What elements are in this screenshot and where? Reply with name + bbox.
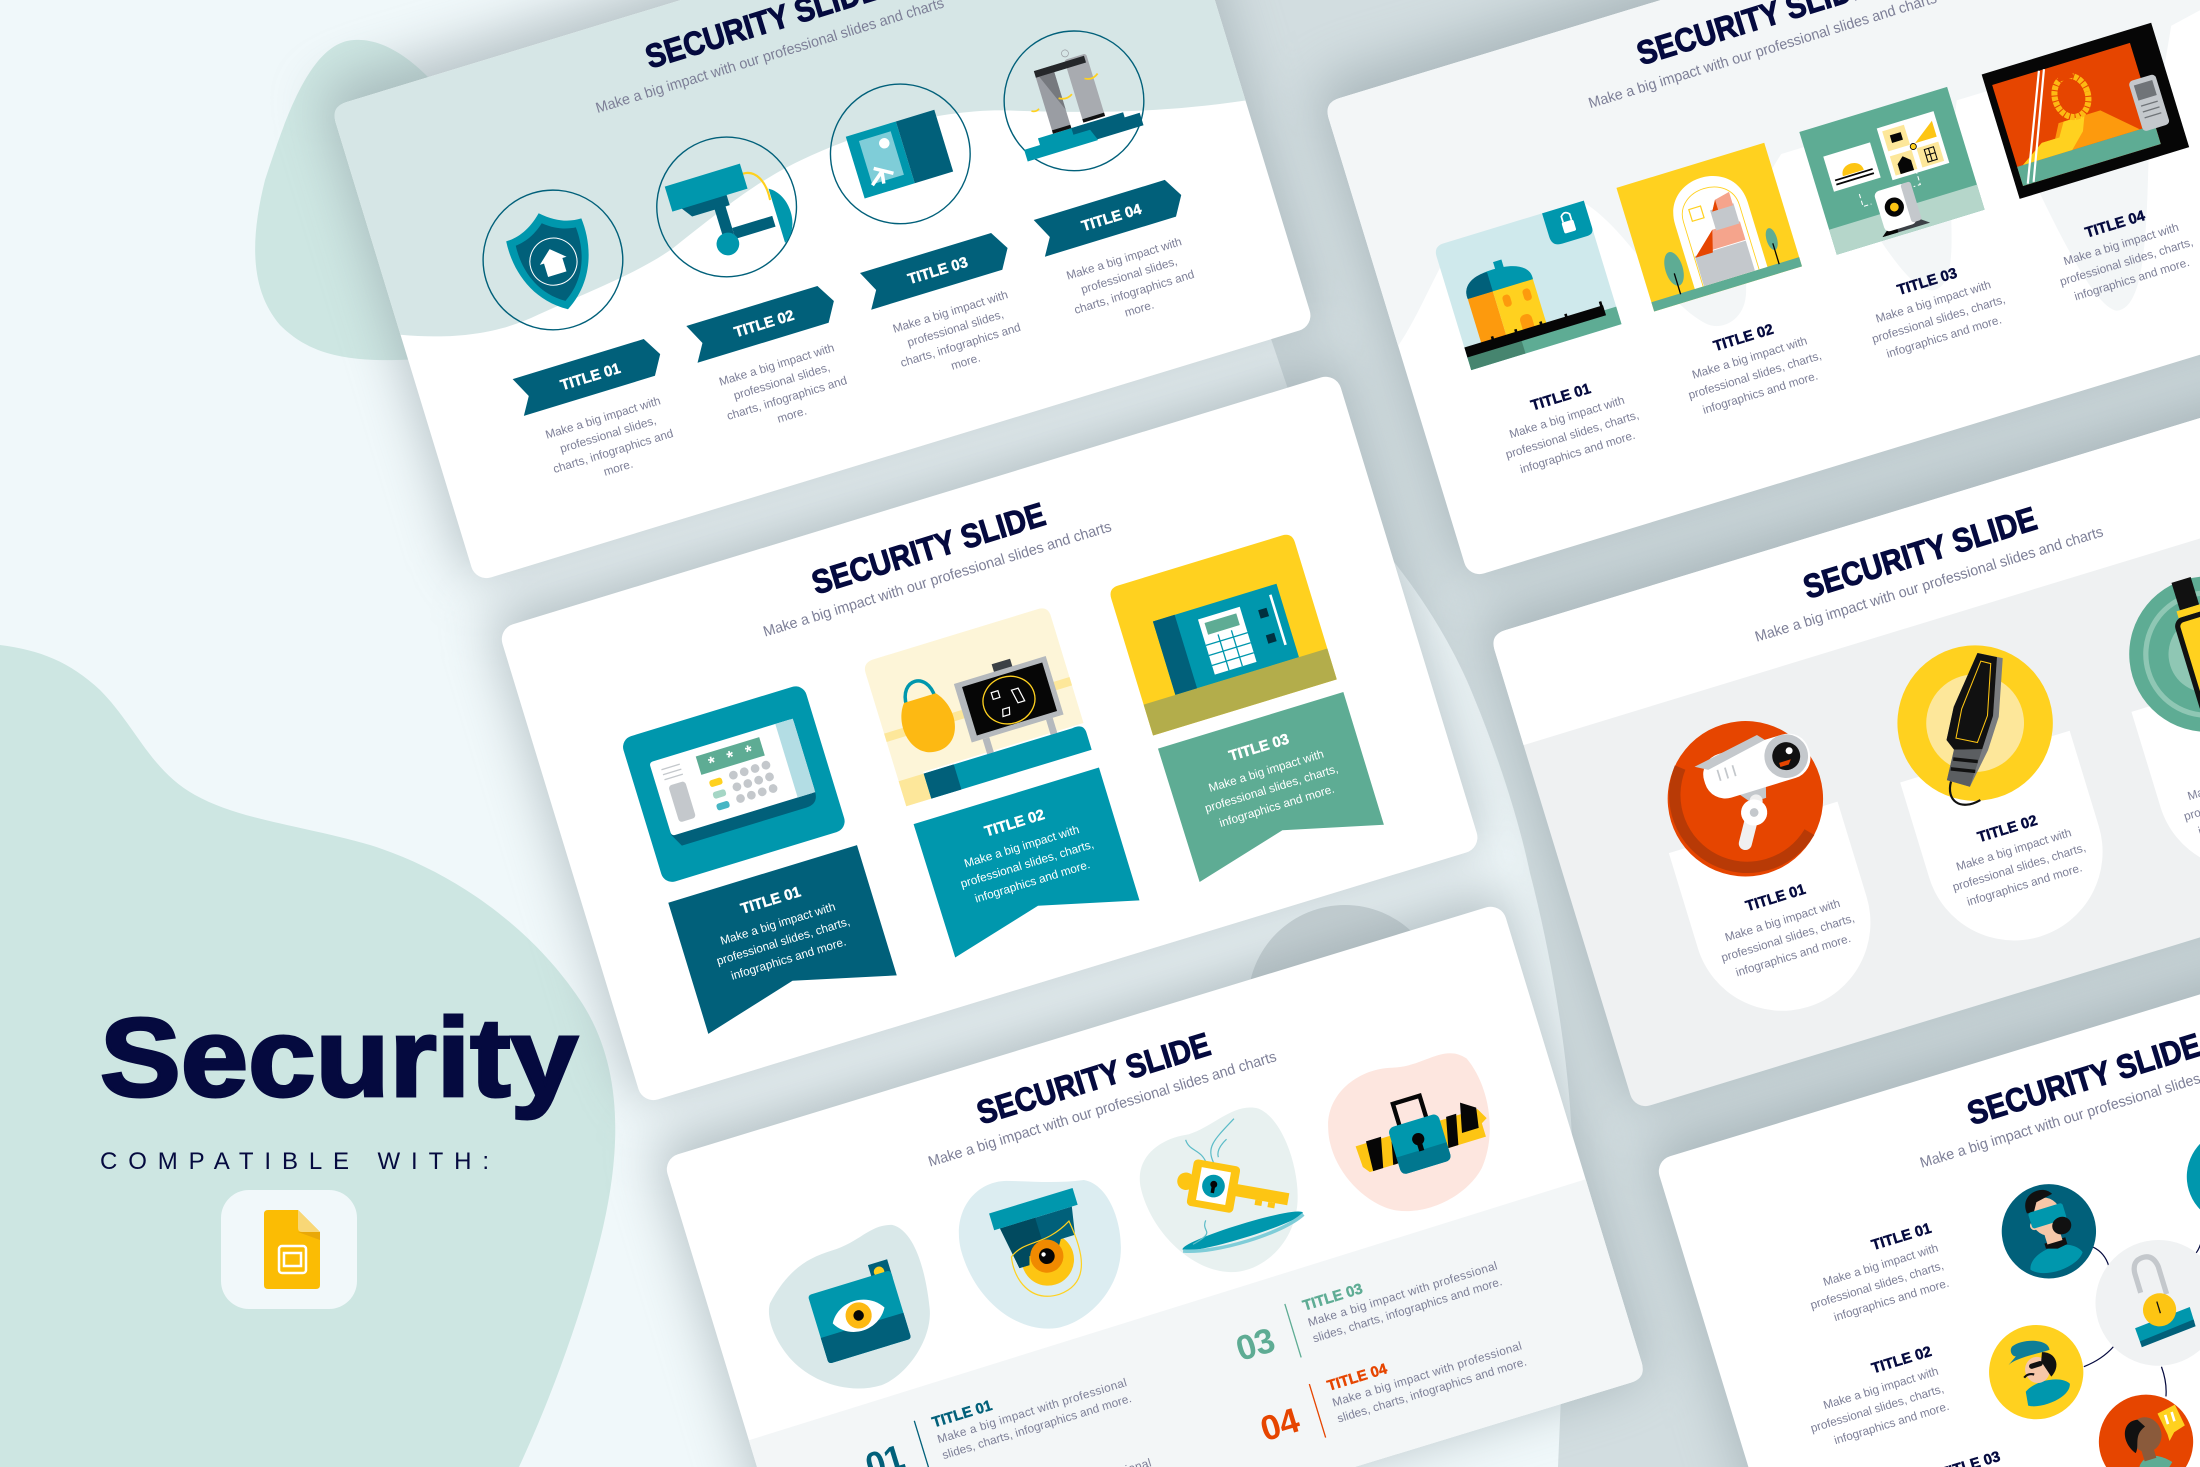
card: camera monitoring windows [1799,87,1985,255]
connector lines [2051,1215,2200,1417]
callout: title 02: professional slides, charts, [959,838,1095,891]
card: house under arch [1616,143,1802,311]
caption: title 02: infographics and more. [1701,369,1820,417]
ribbon and text: title 01: TITLE 01 [559,361,623,394]
callout: title 01: infographics and more. [730,935,848,983]
ribbon and text: title 03: Make a big impact with [891,288,1010,336]
ribbon and text: title 01: more. [602,458,635,479]
tab and icon: handheld detector [1867,623,2125,962]
slide 5: round icons over white tabs [1490,379,2200,1110]
caption: title 03: infographics and more. [1885,313,2003,361]
callout: title 03 [1158,692,1384,882]
callout: title 02: Make a big impact with [963,823,1081,870]
ribbon and text: title 03: more. [949,352,982,373]
callout: title 01: TITLE 01 [739,884,803,918]
caption: title 03 [2170,731,2200,841]
caption: title 02: TITLE 02 [1712,322,1776,355]
list item 04: Make a big impact with professional [1331,1340,1523,1410]
list item 01: Make a big impact with professional [936,1376,1128,1446]
ribbon and text: title 03 [860,230,1038,390]
list item 04: TITLE 04 [1325,1361,1390,1395]
list item 03: Make a big impact with professional [1306,1259,1499,1329]
slide 3 heading: SECURITY SLIDE [973,1026,1215,1132]
ribbon and text: title 04: professional slides, [1079,255,1179,297]
ribbon and text: title 02: professional slides, [732,361,832,403]
caption: title 01: infographics and more. [1519,429,1637,476]
avatar: police officer [1977,1313,2095,1431]
list item 01: TITLE 01 [930,1398,994,1431]
callout: title 02: TITLE 02 [983,807,1047,840]
slide 2 heading: SECURITY SLIDE [808,496,1050,602]
caption: title 03: TITLE 03 [1895,266,1959,299]
text block: title 01: TITLE 01 [1870,1221,1933,1254]
caption: title 02: Make a big impact with [1691,334,1809,382]
ribbon and text: title 01: Make a big impact with [544,394,662,442]
caption: title 03: Make a big impact with [1874,278,1992,326]
callout: title 03: Make a big impact with [1207,748,1325,795]
text block: title 02: infographics and more. [1833,1400,1951,1447]
ribbon and text: title 04 [1034,177,1211,337]
circle icon: metal detector gate [987,14,1161,188]
background: grey right area [1205,0,2200,1467]
avatar: masked person [1990,1172,2108,1290]
caption: title 03 [1859,254,2012,363]
list item 01: slides, charts, infographics and more. [941,1392,1133,1462]
list item 01 [858,1358,1135,1467]
circle icon: safe [813,67,988,241]
callout: title 03: professional slides, charts, [1203,762,1340,815]
compatibility label: COMPATIBLE WITH: [100,1148,489,1175]
avatar: teal circle [2175,1118,2200,1236]
list item 03: slides, charts, infographics and more. [1311,1275,1504,1345]
ribbon and text: title 03: TITLE 03 [906,255,970,288]
callout: title 02: infographics and more. [973,858,1092,906]
callout: title 01 [668,845,897,1034]
hub: padlock [2080,1224,2200,1381]
ribbon and text: title 04: charts, infographics and [1073,268,1196,317]
caption: title 02: TITLE 02 [1976,813,2040,846]
caption: title 02 [1939,802,2093,912]
slide 1: four circular icons with ribbons [331,0,1314,582]
ribbon and text: title 03: charts, infographics and [899,321,1022,370]
caption: title 01 [1707,871,1861,982]
caption: title 04: professional slides, charts, [2058,236,2195,289]
card: baggage scanner [862,606,1092,806]
tab and icon: camera [1638,699,1892,1033]
list item 03: TITLE 03 [1301,1281,1365,1315]
slide 6: people connected to central padlock [1655,905,2200,1467]
icon: Google Slides tile [221,1190,357,1309]
caption: title 01: professional slides, charts, [1504,409,1641,462]
ribbon and text: title 02: charts, infographics and [725,374,849,423]
text block: title 01: Make a big impact with [1822,1242,1940,1289]
card: yellow safe [1108,532,1337,736]
slide 2 subtitle: Make a big impact with our professional slides and charts [762,519,1114,641]
caption: title 02: professional slides, charts, [1951,841,2087,894]
card: vault with gold bars [1982,23,2189,199]
callout: title 01: Make a big impact with [719,900,837,948]
caption: title 04: TITLE 04 [2083,208,2148,242]
caption: title 01 [1492,370,1646,479]
text block: title 01 [1797,1221,1951,1330]
caption: title 04: Make a big impact with [2062,221,2180,268]
slide 2: three illustrated cards with callouts [498,373,1481,1104]
ribbon and text: title 02: more. [776,405,808,426]
caption: title 01: Make a big impact with [1723,897,1842,944]
circle icon: shield [466,173,640,347]
callout: title 03: infographics and more. [1218,783,1336,830]
main title: Security [100,996,578,1120]
callout: title 01: professional slides, charts, [715,915,851,968]
ribbon and text: title 04: TITLE 04 [1080,202,1144,235]
caption: title 01: TITLE 01 [1529,381,1593,414]
callout: title 02 [914,768,1140,958]
caption: title 01: Make a big impact with [1508,394,1626,441]
text block: title 02 [1797,1344,1951,1453]
blob icon: dome camera with eye [945,1151,1142,1349]
caption: title 02: infographics and more. [1965,861,2084,909]
background circle between slides [1248,905,1442,1099]
blob icon: digital key [1127,1099,1319,1293]
text block: title 01: professional slides, charts, [1809,1259,1945,1312]
ribbon and text: title 01: professional slides, [558,414,658,456]
background blob: behind first slide [255,40,440,360]
blob icon: camera with eye [753,1218,952,1411]
caption: title 04: infographics and more. [2073,256,2191,303]
caption: title 01: TITLE 01 [1744,882,1808,915]
list item 03: 03 [1231,1320,1280,1369]
slide 3: four blob icons with numbered list [663,903,1646,1467]
slide 3 subtitle: Make a big impact with our professional slides and charts [927,1049,1279,1171]
ribbon and text: title 04: Make a big impact with [1065,235,1183,283]
callout: title 03: TITLE 03 [1227,732,1291,765]
card: house and padlock [1434,201,1622,370]
caption: title 03: professional slides, charts, [1871,293,2007,346]
card: alarm keypad: * * * [706,741,755,773]
caption: title 02: professional slides, charts, [1687,349,1823,402]
circle icon: security camera [639,120,814,294]
caption: title 01: infographics and more. [1734,932,1852,979]
slide 5 heading: SECURITY SLIDE [1799,501,2041,607]
background blob: bottom left [0,645,615,1467]
slide 4: four illustrated house cards [1324,0,2200,578]
list item 04: slides, charts, infographics and more. [1336,1355,1528,1425]
card: alarm keypad [620,684,847,885]
caption: title 01: professional slides, charts, [1720,912,1856,965]
text block: title 02: professional slides, charts, [1809,1382,1945,1435]
ribbon and text: title 01: charts, infographics and [552,427,675,476]
avatar: person with alert bubble [2087,1383,2200,1467]
caption: title 02 [1675,310,1829,420]
ribbon and text: title 02 [686,283,864,443]
ribbon and text: title 01 [513,336,690,496]
caption: title 04 [2047,197,2200,306]
text block: title 01: infographics and more. [1832,1277,1951,1324]
ribbon and text: title 02: Make a big impact with [718,341,836,389]
list item 03 [1228,1241,1506,1375]
slide 5 subtitle: Make a big impact with our professional slides and charts [1753,524,2105,646]
ribbon and text: title 02: TITLE 02 [732,308,796,341]
caption: title 02: Make a big impact with [1955,826,2073,874]
ribbon and text: title 04: more. [1123,298,1156,320]
list item 04: 04 [1256,1400,1305,1449]
list item 04 [1253,1322,1530,1455]
ribbon and text: title 03: professional slides, [906,308,1005,350]
blob icon: padlock and tape [1313,1041,1512,1230]
text block: title 02: Make a big impact with [1822,1365,1940,1412]
tab and icon: radio scanner [2099,553,2200,892]
text block: title 02: TITLE 02 [1870,1344,1934,1377]
